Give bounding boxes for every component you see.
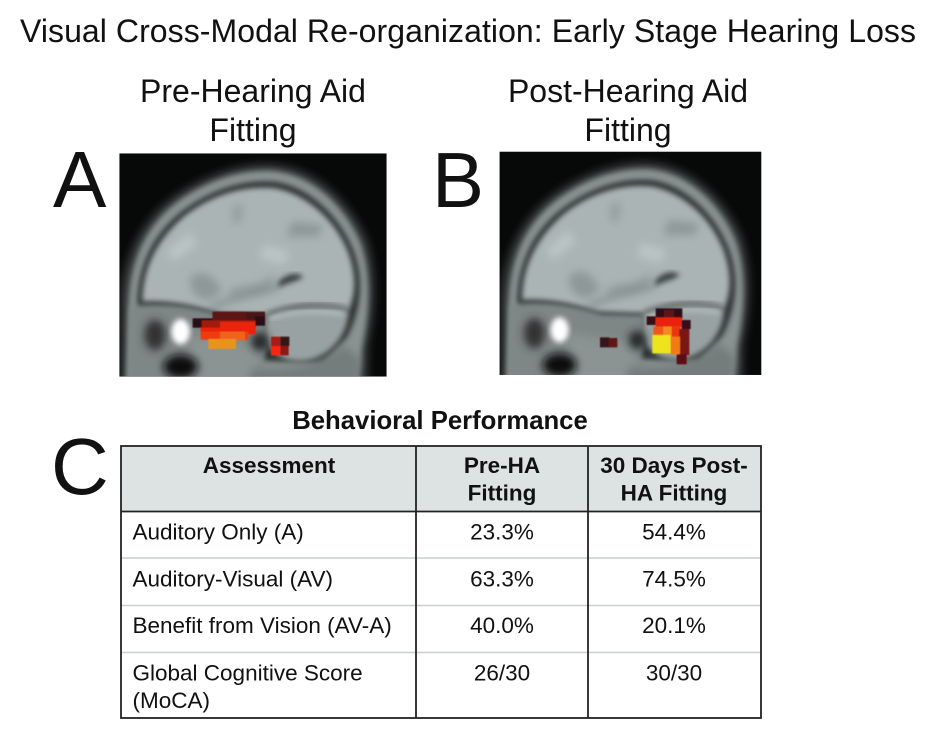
row: benefit from vision: 40.0% [470,613,534,638]
table header row: Fitting [468,480,536,506]
table header row: 30 Days Post- [600,453,748,478]
row: global cognitive score: Global Cognitive Score [132,660,363,686]
row: auditory-visual: 74.5% [642,566,706,592]
title: Visual Cross-Modal Re-organization: Early Stage Hearing Loss [20,13,916,49]
heading: pre-hearing aid fitting [140,73,366,148]
row: global cognitive score [132,660,702,713]
panel label A: A [53,135,107,224]
table: behavioral performance [121,446,761,718]
heading: post-hearing aid fitting [508,73,748,148]
heading: post-hearing aid fitting: Post-Hearing Aid [508,73,748,109]
heat map: pre-fitting activation [193,312,289,355]
heading: pre-hearing aid fitting: Pre-Hearing Aid [140,73,366,109]
row: benefit from vision [132,613,706,638]
row: auditory-visual: 63.3% [470,566,534,592]
row: global cognitive score: (MoCA) [132,688,210,713]
heat map: post-fitting activation [600,308,691,364]
panel: brain scan pre-hearing aid [119,153,387,398]
table header row: Pre-HA [464,453,540,478]
table header row [203,453,748,506]
table header row: HA Fitting [621,480,727,506]
panel: brain scan post-hearing aid [500,152,761,397]
row: auditory only: Auditory Only (A) [132,520,304,544]
table header row: Assessment [203,453,336,478]
row: auditory only: 23.3% [470,520,534,544]
row: global cognitive score: 26/30 [474,660,530,686]
row: auditory-visual: Auditory-Visual (AV) [132,566,333,592]
row: benefit from vision: 20.1% [642,613,706,638]
panel label C: C [51,422,109,511]
row: auditory only: 54.4% [642,520,706,544]
table header background [121,446,761,512]
heading: behavioral performance: Behavioral Performance [292,407,588,435]
row: global cognitive score: 30/30 [646,660,702,686]
panel label B: B [432,136,484,224]
row: auditory only [132,520,706,544]
heading: post-hearing aid fitting: Fitting [584,112,672,148]
row: auditory-visual [132,566,706,592]
heading: pre-hearing aid fitting: Fitting [209,112,297,148]
row: benefit from vision: Benefit from Vision (AV-A) [132,613,392,638]
